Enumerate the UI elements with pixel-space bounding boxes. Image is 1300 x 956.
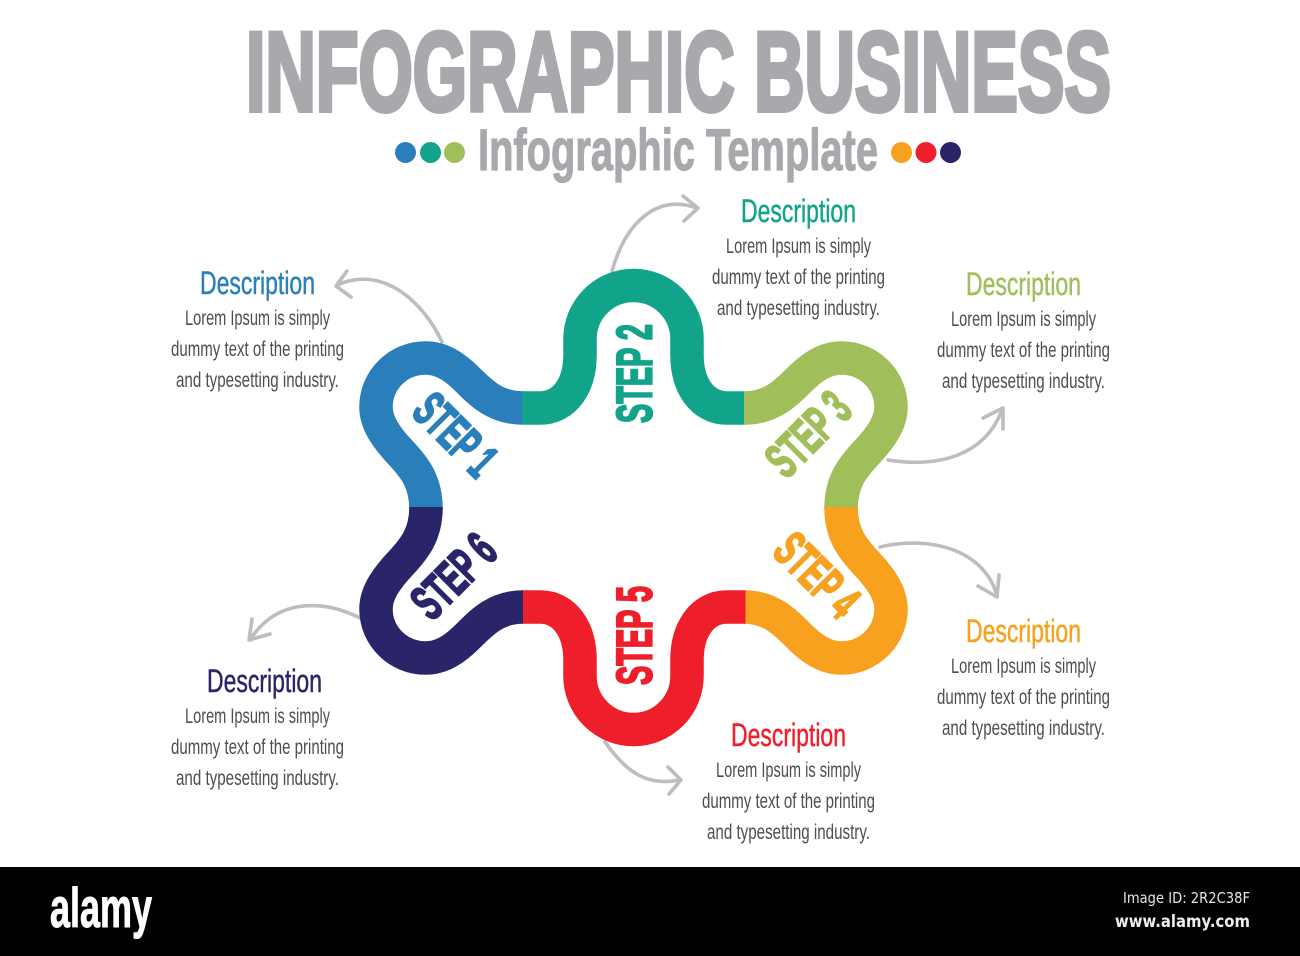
footer bar: www.alamy.com (1115, 912, 1250, 932)
description block: step 2 (712, 193, 885, 320)
arrow: step 2 to description (612, 196, 698, 271)
ribbon segment: step 1 (376, 358, 523, 509)
description block: step 6: dummy text of the printing (171, 736, 344, 759)
description block: step 1: Description (200, 265, 315, 301)
description block: step 3: Lorem Ipsum is simply (951, 308, 1096, 331)
description block: step 4 (937, 613, 1110, 740)
step label 1: STEP 1 (402, 382, 508, 488)
description block: step 2: Lorem Ipsum is simply (726, 235, 871, 258)
description block: step 6: and typesetting industry. (176, 767, 339, 790)
subtitle: Infographic Template (478, 118, 878, 183)
ribbon segment: step 5 (522, 607, 746, 729)
step label 4: STEP 4 (763, 521, 871, 629)
step label 5: STEP 5 (606, 586, 662, 685)
description block: step 2: and typesetting industry. (717, 297, 880, 320)
description block: step 5: dummy text of the printing (702, 790, 875, 813)
ribbon segment: step 2 (522, 285, 746, 408)
description block: step 4: Lorem Ipsum is simply (951, 655, 1096, 678)
step label 6: STEP 6 (400, 522, 507, 630)
description block: step 4: and typesetting industry. (942, 717, 1105, 740)
description block: step 3 (937, 266, 1110, 393)
footer bar: alamy (50, 876, 152, 939)
description block: step 1 (171, 265, 344, 392)
ribbon segment: step 6 (376, 507, 523, 658)
ribbon segment: step 4 (744, 507, 891, 658)
description block: step 1: Lorem Ipsum is simply (185, 307, 330, 330)
arrow: step 3 to description (888, 408, 1003, 462)
arrow: step 6 to description (249, 606, 360, 640)
step label 2: STEP 2 (606, 324, 662, 423)
description block: step 5: Lorem Ipsum is simply (716, 759, 861, 782)
description block: step 2: dummy text of the printing (712, 266, 885, 289)
arrow: step 5 to description (605, 742, 681, 794)
description block: step 1: and typesetting industry. (176, 369, 339, 392)
description block: step 3: and typesetting industry. (942, 370, 1105, 393)
dots: right group (891, 142, 961, 163)
description block: step 3: Description (966, 266, 1081, 302)
arrow: step 4 to description (880, 543, 999, 597)
description block: step 5 (702, 717, 875, 844)
description block: step 5: Description (731, 717, 846, 753)
description block: step 6: Lorem Ipsum is simply (185, 705, 330, 728)
description block: step 6: Description (207, 663, 322, 699)
description block: step 5: and typesetting industry. (707, 821, 870, 844)
dots: left group (395, 142, 465, 163)
step label 3: STEP 3 (754, 380, 862, 488)
description block: step 1: dummy text of the printing (171, 338, 344, 361)
description block: step 2: Description (741, 193, 856, 229)
description block: step 4: dummy text of the printing (937, 686, 1110, 709)
footer bar (0, 867, 1300, 956)
description block: step 6 (171, 663, 344, 790)
footer bar: Image ID: 2R2C38F (1123, 889, 1250, 907)
description block: step 3: dummy text of the printing (937, 339, 1110, 362)
ribbon segment: step 3 (744, 358, 891, 509)
arrow: step 1 to description (336, 271, 442, 342)
description block: step 4: Description (966, 613, 1081, 649)
